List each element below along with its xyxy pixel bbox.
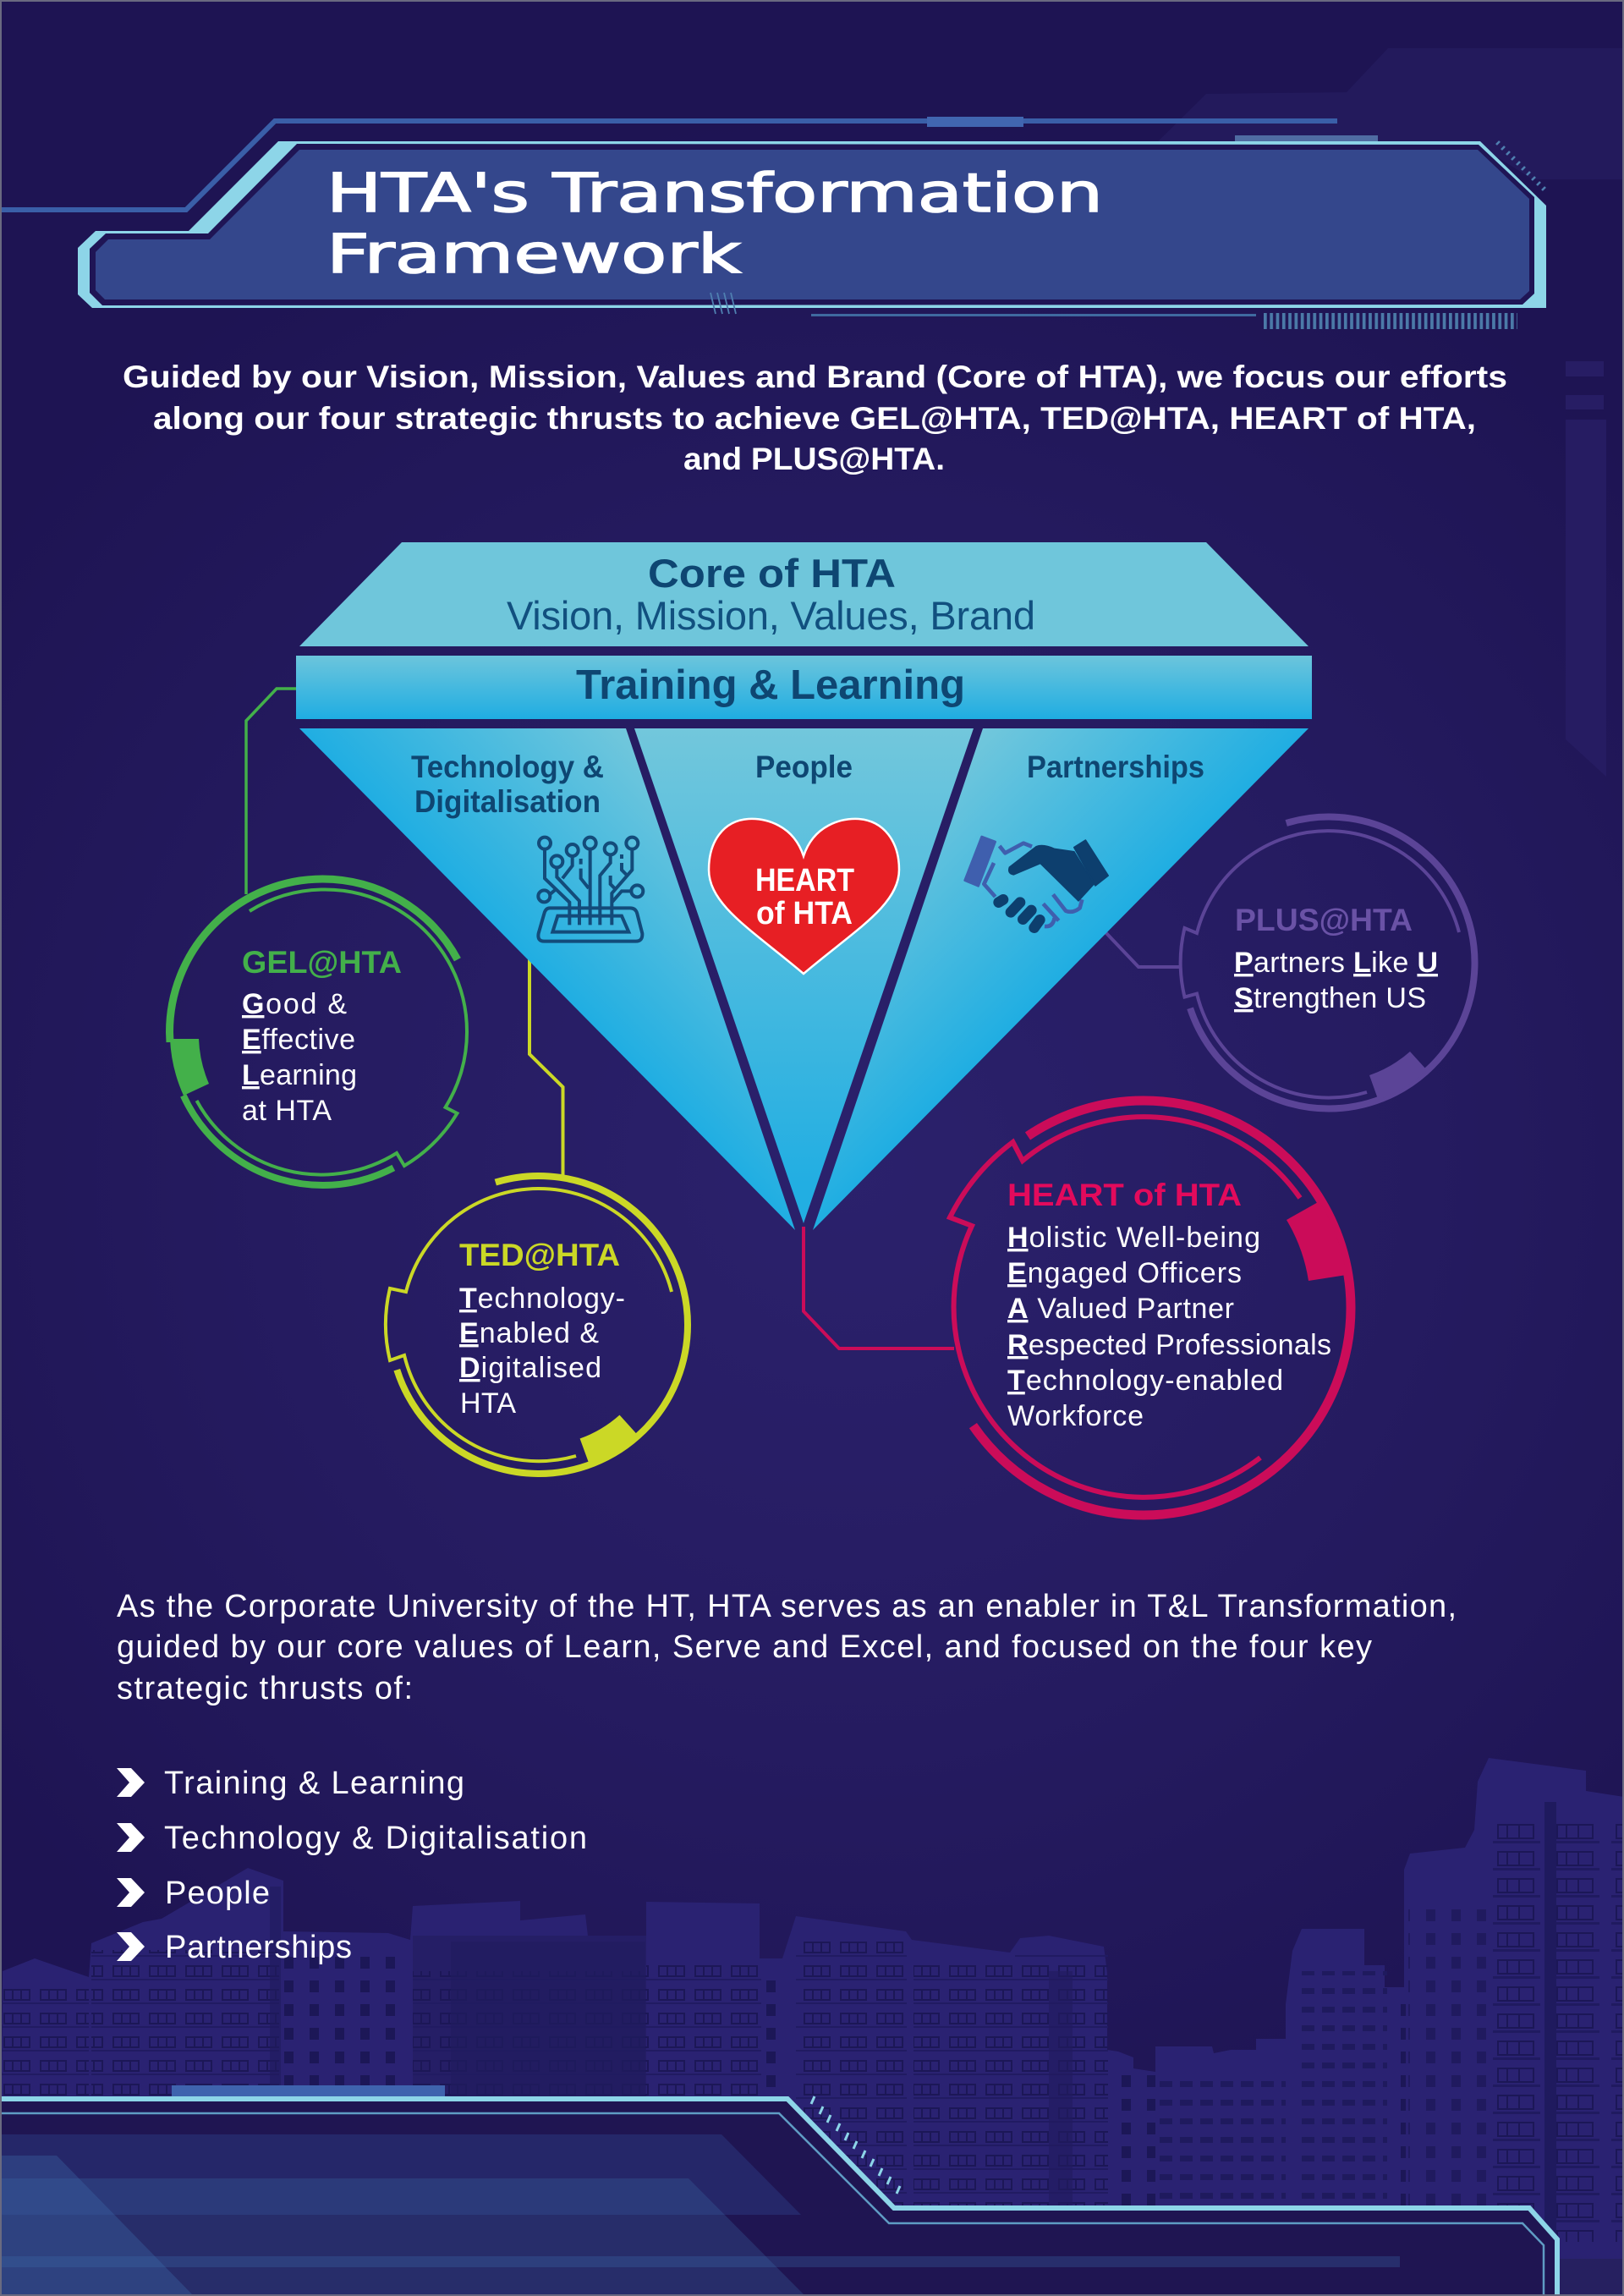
title: Framework	[326, 223, 742, 285]
GEL text: Learning	[242, 1059, 357, 1091]
connector: GEL	[246, 689, 296, 894]
partnerships pane: Partnerships	[1027, 750, 1204, 784]
body paragraph: strategic thrusts of:	[117, 1671, 413, 1706]
body paragraph	[117, 1589, 1457, 1706]
intro text: Guided by our Vision, Mission, Values and Brand (Core of HTA), we focus our efforts	[123, 360, 1507, 394]
TED text: Enabled &	[459, 1317, 599, 1349]
banner frame	[78, 141, 1546, 308]
HEART text: Engaged Officers	[1007, 1257, 1242, 1289]
connector: TED	[529, 956, 563, 1176]
GEL text: Effective	[242, 1024, 355, 1056]
banner accent lines	[0, 117, 1517, 329]
HEART text: Holistic Well-being	[1007, 1222, 1260, 1254]
HEART text	[1007, 1178, 1331, 1432]
icon: heart: HEART	[755, 863, 854, 898]
bottom frame	[0, 2085, 1559, 2296]
TED text	[459, 1238, 625, 1420]
PLUS text: PLUS@HTA	[1235, 903, 1413, 937]
connector: HEART	[804, 1227, 954, 1348]
TED ring	[386, 1176, 688, 1474]
bullet list	[117, 1766, 587, 1965]
title banner	[0, 117, 1546, 329]
technology and digitalisation pane: Technology &	[411, 750, 604, 784]
core of HTA	[299, 542, 1309, 646]
intro text: and PLUS@HTA.	[683, 442, 945, 476]
PLUS ring	[1181, 817, 1475, 1108]
core of HTA: Core of HTA	[648, 551, 896, 596]
intro text: along our four strategic thrusts to achieve GEL@HTA, TED@HTA, HEART of HTA,	[153, 401, 1476, 436]
core of HTA: Vision, Mission, Values, Brand	[507, 593, 1035, 638]
GEL text: GEL@HTA	[242, 945, 402, 980]
PLUS text	[1234, 903, 1438, 1014]
panel: GEL@HTA	[169, 879, 467, 1185]
title	[326, 162, 1103, 285]
GEL text	[242, 945, 402, 1127]
body paragraph: As the Corporate University of the HT, HTA serves as an enabler in T&L Transformation,	[117, 1589, 1457, 1624]
bullet: Technology & Digitalisation: Technology & Digitalisation	[164, 1821, 587, 1856]
bullet: People: People	[165, 1876, 270, 1911]
city skyline	[0, 1758, 1624, 2296]
banner hatch marks	[710, 141, 1545, 314]
HEART ring	[950, 1101, 1351, 1515]
training and learning band	[296, 656, 1312, 719]
people pane	[634, 728, 974, 1223]
GEL text: Good &	[242, 988, 347, 1020]
TED text: Digitalised	[459, 1352, 601, 1384]
HEART text: A Valued Partner	[1007, 1293, 1234, 1325]
people pane: People	[755, 750, 853, 784]
HEART text: HEART of HTA	[1007, 1178, 1242, 1212]
HEART text: Respected Professionals	[1007, 1329, 1331, 1361]
TED text: TED@HTA	[459, 1238, 620, 1272]
panel: TED@HTA	[386, 1176, 688, 1474]
TED text: Technology-	[459, 1283, 625, 1315]
HEART text: Workforce	[1007, 1400, 1144, 1432]
TED text: HTA	[460, 1387, 516, 1420]
training and learning band: Training & Learning	[576, 662, 965, 708]
technology and digitalisation pane	[299, 728, 795, 1230]
connector: PLUS	[1106, 932, 1181, 967]
bottom panels	[0, 2134, 1400, 2296]
icon: heart: of HTA	[756, 896, 853, 931]
bullet: Partnerships: Partnerships	[165, 1930, 352, 1965]
icon: circuit chip	[538, 838, 643, 942]
intro text	[123, 360, 1507, 476]
GEL ring	[169, 879, 467, 1185]
title: HTA's Transformation	[326, 162, 1103, 224]
icon: handshake	[965, 837, 1108, 928]
panel: HEART of HTA	[950, 1101, 1351, 1515]
technology and digitalisation pane: Digitalisation	[414, 784, 601, 819]
HEART text: Technology-enabled	[1007, 1365, 1283, 1397]
GEL text: at HTA	[242, 1095, 332, 1127]
icon: heart	[709, 819, 899, 974]
partnerships pane	[813, 728, 1309, 1230]
bullet: Training & Learning: Training & Learning	[164, 1766, 464, 1801]
body paragraph: guided by our core values of Learn, Serve and Excel, and focused on the four key	[117, 1629, 1372, 1665]
panel: PLUS@HTA	[1181, 817, 1475, 1108]
diamond diagram	[296, 542, 1312, 1230]
PLUS text: Strengthen US	[1234, 982, 1426, 1014]
PLUS text: Partners Like U	[1234, 947, 1438, 979]
bullet: People	[117, 1876, 270, 1911]
